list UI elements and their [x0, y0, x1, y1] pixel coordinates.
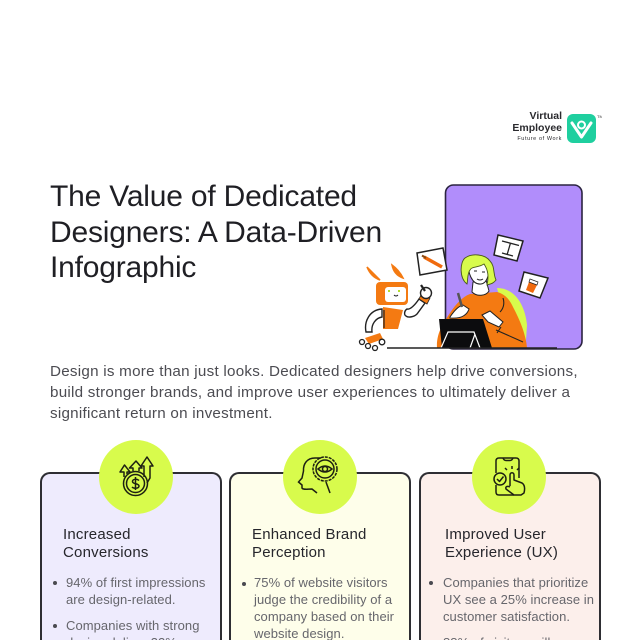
logo wordmark: Employee — [512, 122, 562, 134]
icon: phone with tap — [472, 440, 546, 514]
heading: increased conversions: Conversions — [63, 544, 149, 561]
intro paragraph — [50, 363, 578, 422]
icon card: T — [494, 235, 523, 261]
heading: increased conversions: Increased — [63, 526, 131, 543]
heading: improved user experience: Improved User — [445, 526, 546, 543]
ground line — [387, 347, 557, 349]
icon: head with eye — [283, 440, 357, 514]
bullets: conversions: are design-related. — [66, 592, 176, 607]
logo wordmark — [512, 110, 562, 142]
illustration: designer with robot — [358, 184, 583, 352]
bullets: brand perception: judge the credibility of a — [254, 592, 392, 607]
lime chair — [497, 288, 527, 340]
bullets: brand perception — [242, 575, 394, 640]
panel: increased conversions — [40, 472, 222, 640]
title: Infographic — [50, 251, 196, 284]
intro paragraph: significant return on investment. — [50, 405, 273, 422]
bullets: brand perception: 75% of website visitors — [254, 575, 388, 590]
heading: increased conversions — [63, 526, 149, 561]
heading: enhanced brand perception: Perception — [252, 544, 326, 561]
heading: enhanced brand perception — [252, 526, 367, 561]
icon: money growth — [99, 440, 173, 514]
panel: enhanced brand perception — [229, 472, 411, 640]
intro paragraph: Design is more than just looks. Dedicated designers help drive conversions, — [50, 363, 578, 380]
person — [437, 255, 527, 348]
purple panel — [446, 185, 582, 349]
bullets: brand perception: company based on their — [254, 609, 394, 624]
bullets: user experience: customer satisfaction. — [443, 609, 570, 624]
title: The Value of Dedicated — [50, 180, 357, 213]
intro paragraph: build stronger brands, and improve user experiences to ultimately deliver a — [50, 384, 570, 401]
logo wordmark: Virtual — [530, 110, 562, 122]
bullets: user experience: UX see a 25% increase in — [443, 592, 594, 607]
bullets: user experience — [429, 575, 594, 640]
title: Designers: A Data-Driven — [50, 216, 382, 248]
logo wordmark: Future of Work — [517, 136, 562, 142]
heading: improved user experience: Experience (UX) — [445, 544, 558, 561]
heading: enhanced brand perception: Enhanced Brand — [252, 526, 367, 543]
drawing tablet — [439, 319, 492, 348]
bullets: conversions — [53, 575, 205, 640]
heading: improved user experience — [445, 526, 558, 561]
logo: Virtual Employee — [512, 110, 602, 143]
icon card: pencil — [417, 248, 447, 275]
bullets: conversions: 94% of first impressions — [66, 575, 205, 590]
title — [50, 180, 382, 284]
logo mark — [567, 114, 602, 143]
robot — [360, 265, 432, 350]
panel: improved user experience — [419, 472, 601, 640]
bullets: user experience: Companies that prioritize — [443, 575, 588, 590]
icon card: battery — [519, 272, 548, 298]
bullets: conversions: Companies with strong — [66, 618, 200, 633]
